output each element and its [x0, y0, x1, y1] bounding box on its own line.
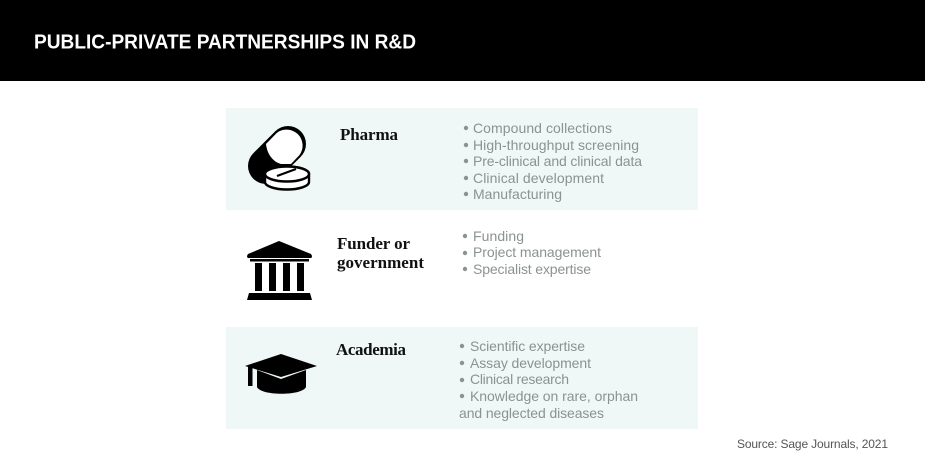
title: PUBLIC-PRIVATE PARTNERSHIPS IN R&D [34, 32, 416, 54]
heading: funder or government [337, 234, 424, 272]
panel: academia [226, 327, 698, 429]
list: academia contributions [459, 338, 638, 421]
list: pharma contributions [464, 120, 642, 202]
list: pharma contributions: Clinical development [473, 170, 604, 186]
list: funder contributions [463, 228, 601, 277]
list: pharma contributions: High-throughput screening [473, 137, 639, 153]
list: academia contributions: Assay development [470, 355, 591, 371]
panel: pharma [226, 108, 698, 210]
heading: funder or government: Funder or [337, 234, 410, 253]
icon: graduation cap [245, 354, 317, 394]
heading: funder or government: government [337, 253, 424, 272]
heading: academia: Academia [336, 340, 406, 359]
list: academia contributions: Clinical research [470, 371, 569, 387]
icon: capsule and tablet [265, 130, 309, 190]
heading: pharma: Pharma [340, 125, 398, 144]
list: pharma contributions: Compound collections [473, 120, 612, 136]
list: academia contributions: Knowledge on rare, orphan [470, 388, 638, 404]
list: academia contributions: Scientific expertise [470, 338, 585, 354]
list: funder contributions: Project management [473, 244, 601, 260]
panel: funder or government [247, 228, 601, 300]
header band [0, 0, 925, 81]
list: funder contributions: Funding [473, 228, 524, 244]
list: academia contributions: and neglected diseases [459, 405, 604, 421]
icon: government building [247, 241, 312, 300]
source note: Source: Sage Journals, 2021 [737, 437, 888, 451]
list: pharma contributions: Pre-clinical and clinical data [473, 153, 642, 169]
list: pharma contributions: Manufacturing [473, 186, 562, 202]
list: funder contributions: Specialist expertise [473, 261, 591, 277]
